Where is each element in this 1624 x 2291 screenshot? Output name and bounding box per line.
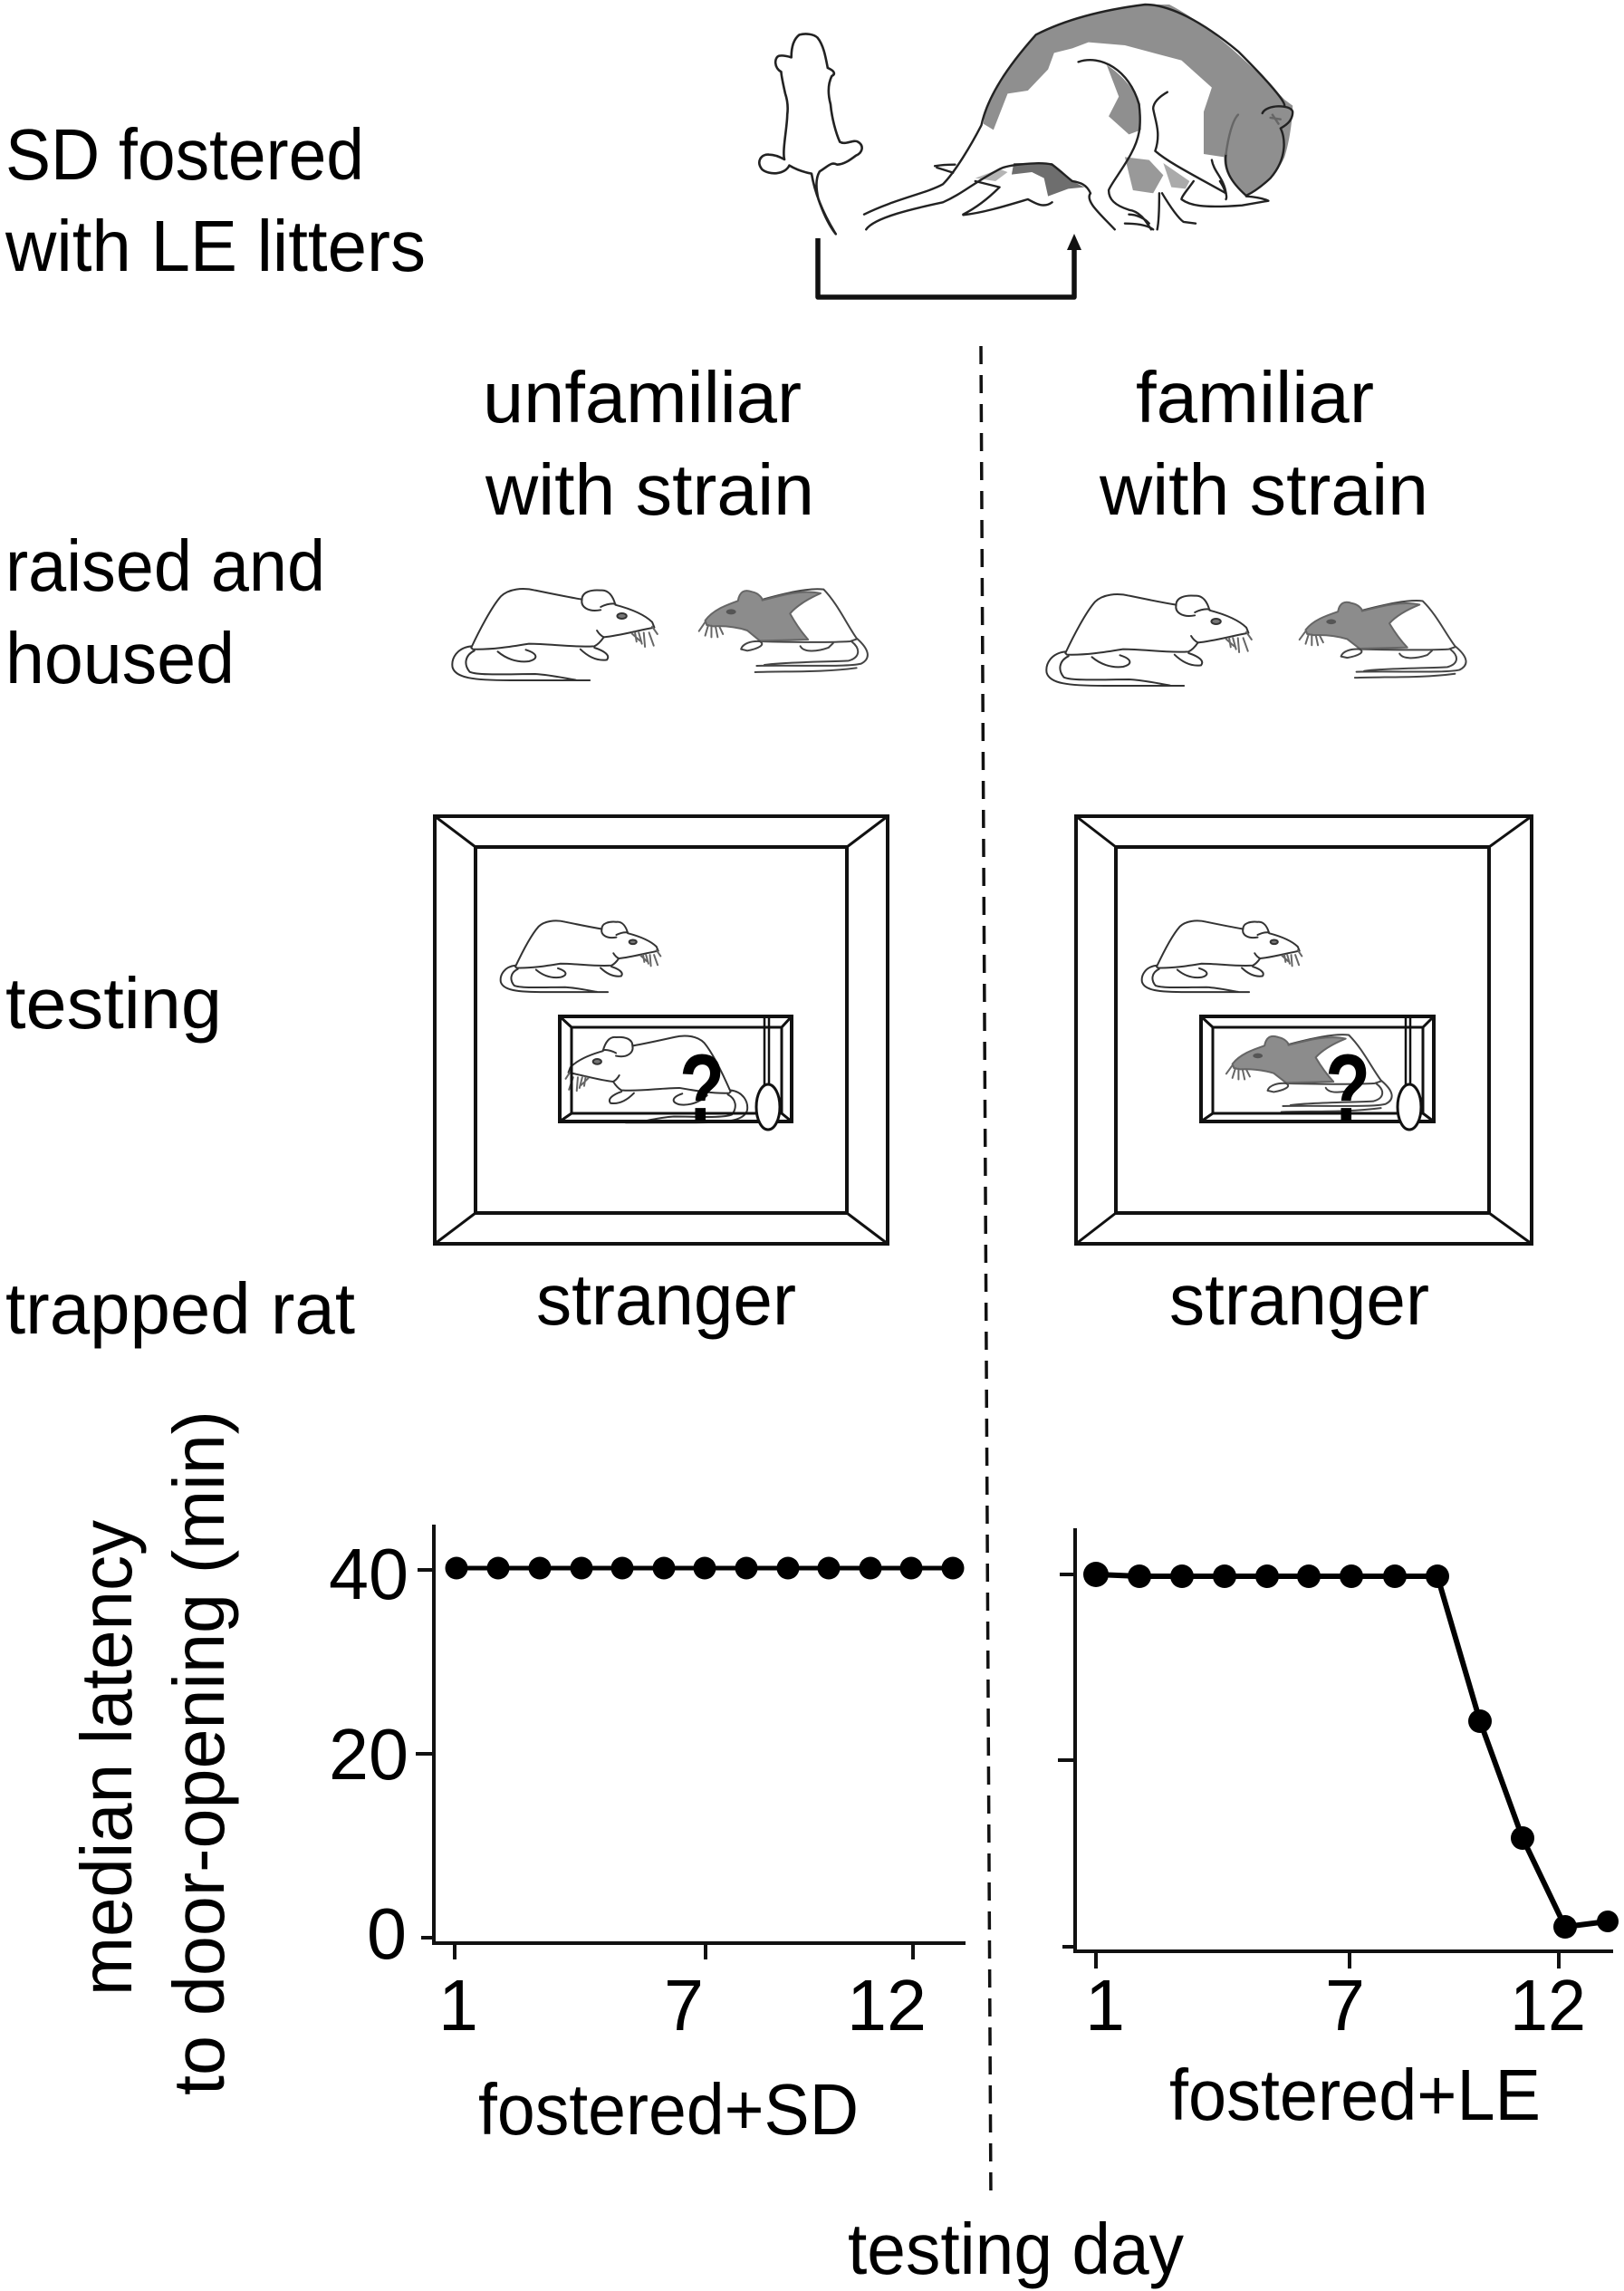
y-axis title: median latency bbox=[66, 1520, 147, 1996]
data line bbox=[1083, 1562, 1619, 1939]
y tick labels: 40 bbox=[329, 1534, 408, 1614]
column heading: unfamiliar with strain: unfamiliar bbox=[483, 357, 802, 438]
column heading: unfamiliar with strain: with strain bbox=[485, 449, 814, 530]
column heading: familiar with strain: familiar bbox=[1136, 357, 1374, 438]
heading: SD fostered with LE litters: SD fostered bbox=[5, 114, 364, 195]
label: fostered+SD: fostered+SD bbox=[478, 2069, 859, 2150]
trapped hooded rat bbox=[1226, 1035, 1392, 1112]
y-axis title: to door-opening (min) bbox=[159, 1410, 239, 2095]
x tick labels: 7 bbox=[1325, 1965, 1365, 2046]
dashed divider between conditions bbox=[981, 346, 991, 2201]
row label: raised and housed: raised and bbox=[5, 525, 325, 606]
label: fostered+LE: fostered+LE bbox=[1169, 2055, 1541, 2135]
line chart: fostered+LE bbox=[1058, 1528, 1619, 2046]
row label: testing: testing bbox=[5, 963, 222, 1044]
column heading: unfamiliar with strain bbox=[483, 357, 814, 530]
row label: raised and housed bbox=[5, 525, 325, 698]
y tick labels: 20 bbox=[329, 1714, 408, 1795]
x tick labels: 12 bbox=[1510, 1965, 1586, 2046]
restrainer bbox=[1201, 1016, 1434, 1130]
question mark: ? bbox=[679, 1035, 725, 1141]
icon: hooded LE rat, familiar group bbox=[1300, 601, 1466, 678]
icon: hooded LE rat, unfamiliar group bbox=[699, 589, 868, 672]
heading: SD fostered with LE litters: with LE litters bbox=[5, 206, 426, 286]
icon: white SD rat, unfamiliar group bbox=[452, 589, 658, 680]
panel: arena with trapped LE stranger bbox=[1076, 816, 1532, 1244]
icon: SD pup seen from above bbox=[759, 34, 862, 234]
x-axis title: testing day: testing day bbox=[848, 2209, 1184, 2289]
column heading: familiar with strain bbox=[1099, 357, 1428, 530]
y-axis title bbox=[66, 1410, 239, 2095]
x tick labels: 12 bbox=[847, 1965, 927, 2046]
heading: SD fostered with LE litters bbox=[5, 114, 426, 286]
free rat bbox=[501, 920, 660, 992]
icon: LE mother rat licking pup bbox=[864, 5, 1292, 229]
x tick labels: 7 bbox=[664, 1965, 704, 2046]
restrainer bbox=[560, 1016, 792, 1130]
icon: white SD rat, familiar group bbox=[1046, 594, 1252, 686]
row label: trapped rat: trapped rat bbox=[5, 1268, 355, 1349]
arena walls bbox=[435, 816, 888, 1244]
column heading: familiar with strain: with strain bbox=[1099, 449, 1428, 530]
y tick labels: 0 bbox=[367, 1893, 407, 1974]
row label: raised and housed: housed bbox=[5, 618, 235, 698]
axes and ticks bbox=[1058, 1528, 1613, 1969]
x tick labels bbox=[438, 1965, 927, 2046]
label: stranger, left: stranger bbox=[536, 1259, 796, 1340]
x tick labels: 1 bbox=[1085, 1965, 1125, 2046]
trapped white rat bbox=[566, 1035, 747, 1122]
label: stranger, right: stranger bbox=[1169, 1259, 1429, 1340]
data line bbox=[446, 1556, 964, 1580]
y tick labels bbox=[329, 1534, 408, 1974]
arrow: foster transfer bracket bbox=[818, 234, 1081, 297]
x tick labels bbox=[1085, 1965, 1586, 2046]
axes and ticks bbox=[416, 1525, 966, 1959]
arena walls bbox=[1076, 816, 1532, 1244]
line chart: fostered+SD bbox=[329, 1525, 966, 2046]
free rat bbox=[1142, 920, 1302, 992]
question mark: ? bbox=[1325, 1035, 1370, 1141]
panel: arena with trapped SD stranger bbox=[435, 816, 888, 1244]
x tick labels: 1 bbox=[438, 1965, 478, 2046]
